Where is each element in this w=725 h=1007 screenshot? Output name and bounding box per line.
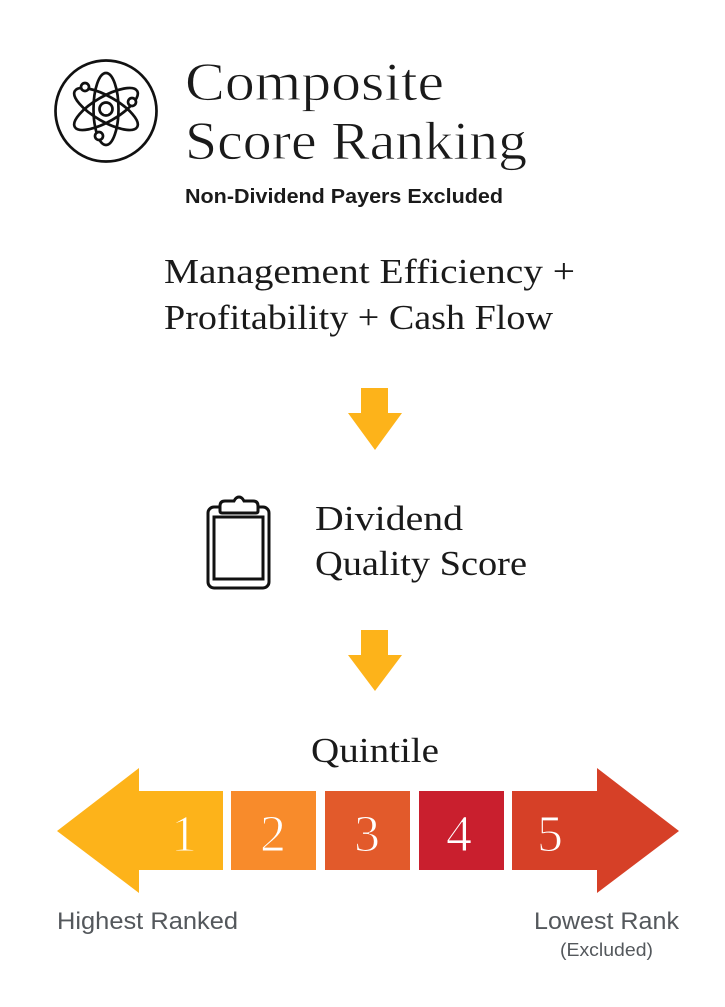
quintile 4 — [419, 791, 504, 870]
label: lowest rank: Lowest Rank — [534, 908, 680, 935]
title: Composite — [185, 52, 444, 112]
quintile 2 — [231, 791, 316, 870]
quintile 3: 3 — [354, 806, 380, 863]
formula text: Profitability + Cash Flow — [164, 298, 554, 337]
quintile 3 — [325, 791, 410, 870]
label: highest ranked: Highest Ranked — [57, 908, 238, 935]
heading: quintile: Quintile — [311, 731, 439, 770]
quintile 1 arrow: 1 — [171, 806, 197, 863]
formula text — [164, 252, 575, 337]
icon: clipboard — [208, 497, 269, 588]
quintile 5 arrow: 5 — [537, 806, 563, 863]
quintile 4: 4 — [446, 806, 472, 863]
title: Score Ranking — [185, 111, 527, 171]
title — [185, 52, 527, 171]
formula text: Management Efficiency + — [164, 252, 575, 291]
quintile 5 arrow — [512, 768, 679, 893]
label: excluded: (Excluded) — [560, 940, 653, 960]
subtitle: Non-Dividend Payers Excluded — [185, 186, 503, 208]
arrow: down 2 — [348, 630, 402, 691]
arrow: down 1 — [348, 388, 402, 450]
quintile 1 arrow — [57, 768, 223, 893]
quintile 2: 2 — [260, 806, 286, 863]
score label — [315, 499, 527, 583]
score label: Quality Score — [315, 544, 527, 583]
icon: atom — [56, 60, 156, 162]
score label: Dividend — [315, 499, 464, 538]
